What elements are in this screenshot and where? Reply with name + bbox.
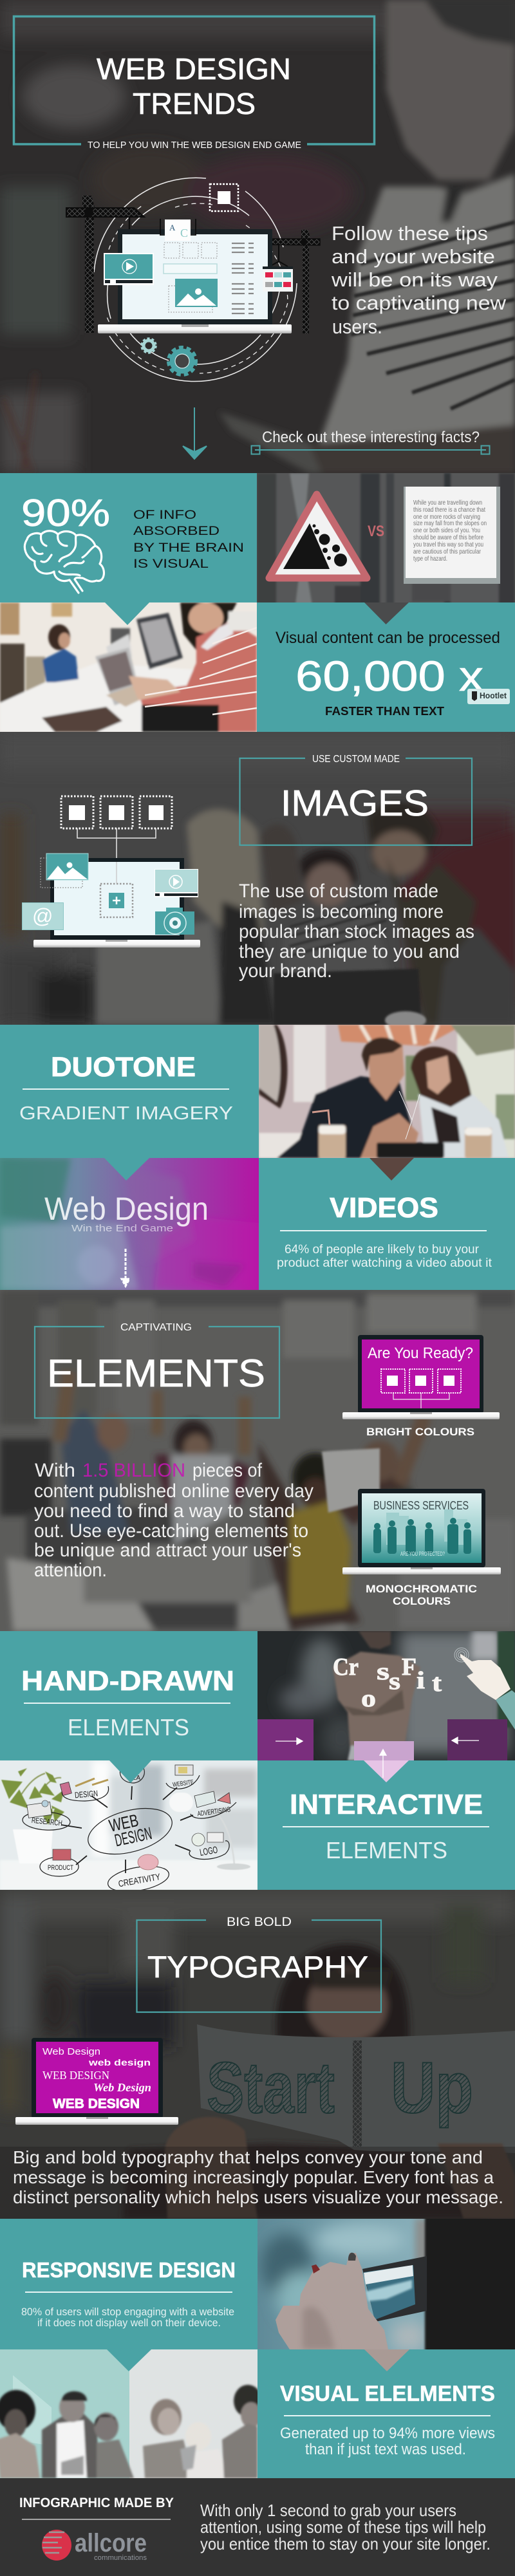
- eyebrow: BIG BOLD: [227, 1916, 292, 1929]
- stat caption: OF INFO: [133, 509, 196, 522]
- text card: are cautious of this particular: [413, 548, 481, 555]
- photo: couple with phone: [259, 1025, 515, 1158]
- duotone title: Win the End Game: [71, 1223, 173, 1234]
- doodle icons: [27, 1765, 230, 1870]
- subheading: ELEMENTS: [68, 1714, 189, 1741]
- photo: women at computers: [0, 602, 257, 732]
- stat: [21, 2306, 234, 2329]
- phone: [362, 2256, 427, 2322]
- subheading: GRADIENT IMAGERY: [19, 1103, 233, 1124]
- icon: rock-fall road sign: [269, 494, 367, 578]
- stat heading: Visual content can be processed: [276, 629, 500, 647]
- paragraph: you need to find a way to stand: [34, 1500, 295, 1522]
- title: WEB DESIGN: [97, 52, 291, 86]
- section: typography: [0, 1890, 515, 2219]
- heading: HAND-DRAWN: [21, 1665, 234, 1697]
- laptop: monochromatic: [342, 1489, 501, 1574]
- hand: [276, 2253, 388, 2349]
- stat: if it does not display well on their device.: [37, 2317, 221, 2329]
- divider: [280, 1230, 487, 1231]
- image tile: [175, 279, 218, 307]
- doodles: [22, 1767, 236, 1896]
- panel: 90% stat: [0, 473, 257, 602]
- paragraph: [239, 881, 474, 982]
- paragraph: attention.: [34, 1560, 107, 1581]
- notch: phone photo: [364, 2349, 409, 2371]
- callout: check out: [251, 429, 489, 454]
- crossfit letters: F: [402, 1654, 417, 1681]
- section: footer: [0, 2478, 515, 2576]
- illustration: custom image laptop: [22, 796, 200, 947]
- icon: pointing hand: [454, 1648, 515, 1730]
- stat: 80% of users will stop engaging with a website: [21, 2306, 234, 2318]
- laptop: type samples: Web Design: [93, 2081, 151, 2094]
- paragraph: Big and bold typography that helps convey your tone and: [13, 2147, 483, 2167]
- crossfit letters: i: [417, 1667, 425, 1694]
- paragraph: The use of custom made: [239, 881, 438, 902]
- stat footnote: FASTER THAN TEXT: [325, 705, 444, 718]
- stat number: 90%: [21, 492, 110, 534]
- stat number: 60,000 x: [295, 652, 483, 700]
- crossfit letters: [333, 1658, 442, 1707]
- section: responsive and visual: [0, 2208, 515, 2478]
- notch: pink with arrow: [364, 1760, 409, 1782]
- paragraph: message is becoming increasingly popular. Every font has a: [13, 2167, 494, 2187]
- heading: VIDEOS: [330, 1192, 438, 1224]
- text card: While you are travelling down: [413, 499, 482, 507]
- section: hero header: [0, 0, 515, 473]
- section: custom images: [0, 732, 515, 1029]
- photo: hand-drawn doodles: PRODUCT: [48, 1864, 73, 1872]
- notch: teal: [107, 2349, 151, 2371]
- panel: videos: [259, 1158, 515, 1290]
- stat caption: BY THE BRAIN: [133, 541, 244, 555]
- dashed arrow: [122, 1249, 129, 1286]
- stat caption: ABSORBED: [133, 525, 220, 538]
- laptop: monochromatic: ARE YOU PROTECTED?: [400, 1551, 445, 1557]
- photo: hand-drawn doodles: ADVERTISING: [197, 1806, 231, 1818]
- intro text: will be on its way: [331, 268, 498, 291]
- notch: photo teal: [105, 602, 149, 625]
- intro text: and your website: [332, 245, 495, 268]
- caption: [366, 1583, 477, 1607]
- photo: hand holding phone: [258, 2219, 515, 2349]
- section: duotone and videos: [0, 1025, 515, 1290]
- type card: C: [180, 227, 188, 239]
- notebook lettering: Start: [207, 2048, 335, 2128]
- heading: IMAGES: [281, 783, 429, 824]
- VS: VS: [368, 523, 384, 540]
- laptop: type samples: WEB DESIGN: [53, 2096, 140, 2111]
- stat: [280, 2425, 495, 2458]
- paragraph: 1.5 BILLION: [82, 1460, 185, 1481]
- notch: teal: [109, 1760, 151, 1783]
- divider: [284, 2415, 491, 2416]
- notch: [104, 1158, 149, 1181]
- section: captivating elements: [0, 1290, 515, 1631]
- left crane: [66, 196, 149, 333]
- divider: [23, 1088, 229, 1090]
- video stat: product after watching a video about it: [277, 1256, 492, 1270]
- intro text: to captivating new: [332, 292, 507, 314]
- video tile: [154, 869, 198, 897]
- video stat: 64% of people are likely to buy your: [285, 1243, 480, 1256]
- paragraph: be unique and attract your user's: [34, 1540, 301, 1561]
- laptop: bright colours: [342, 1335, 500, 1419]
- footer background: [0, 2478, 515, 2576]
- at tile: [22, 902, 63, 929]
- duotone title: Web Design: [44, 1191, 209, 1227]
- stat caption: [133, 509, 244, 571]
- caption: MONOCHROMATIC: [366, 1583, 477, 1595]
- panel: 60,000x stat: [257, 602, 515, 732]
- heading frame: [239, 758, 472, 845]
- photo: hand-drawn doodles: DESIGN: [74, 1788, 98, 1800]
- panel: responsive design: [0, 2219, 258, 2349]
- heading: TYPOGRAPHY: [147, 1950, 368, 1984]
- at tile: @: [32, 904, 53, 928]
- closing text: With only 1 second to grab your users: [200, 2501, 456, 2520]
- badge: Hootlet: [467, 689, 510, 704]
- selection square: [210, 184, 238, 211]
- image tile: [46, 854, 88, 880]
- video tile: [104, 253, 154, 285]
- closing text: [200, 2501, 491, 2553]
- crossfit letters: s: [389, 1668, 400, 1695]
- photo: hand-drawn doodles: CREATIVITY: [117, 1871, 162, 1889]
- notch: photo: [370, 1158, 414, 1181]
- laptop: type samples: WEB DESIGN: [42, 2069, 109, 2082]
- crossfit letters: s: [377, 1658, 389, 1685]
- stat: Generated up to 94% more views: [280, 2425, 495, 2442]
- heading: DUOTONE: [51, 1052, 196, 1083]
- arrows: [276, 1737, 479, 1760]
- text card: one or both sides of you. You: [413, 527, 480, 534]
- panel: interactive: [258, 1760, 515, 1890]
- heading frame: [136, 1920, 381, 2012]
- notch: wood: [364, 602, 409, 624]
- paragraph: popular than stock images as: [239, 921, 474, 942]
- photo: hand-drawn doodles: [0, 1760, 258, 1896]
- gears: [142, 339, 196, 375]
- icon: brain: [24, 531, 104, 593]
- paragraph: they are unique to you and: [239, 941, 460, 962]
- laptop: [98, 229, 292, 333]
- caption: BRIGHT COLOURS: [366, 1426, 474, 1438]
- stat caption: IS VISUAL: [133, 557, 209, 571]
- logo: allcore: communications: [94, 2554, 147, 2562]
- intro text: Follow these tips: [332, 222, 488, 245]
- background photo: man with start up notebook: [0, 1890, 515, 2219]
- video stat: [277, 1243, 492, 1270]
- crossfit letters: t: [432, 1670, 442, 1697]
- paragraph: [13, 2147, 503, 2207]
- type card: [160, 219, 196, 241]
- divider: [25, 2291, 232, 2293]
- heading: INTERACTIVE: [290, 1789, 483, 1820]
- panel: image vs text on wood: [257, 473, 515, 602]
- text card: you travel this way so that you: [413, 541, 483, 548]
- panel: hand-drawn: [0, 1631, 258, 1760]
- paragraph: images is becoming more: [239, 901, 444, 922]
- photo: hand-drawn doodles: LOGO: [199, 1845, 219, 1858]
- text card: size may fall from the slopes on: [413, 519, 487, 527]
- paragraph: [34, 1460, 314, 1581]
- paragraph: out. Use eye-catching elements to: [34, 1520, 308, 1542]
- divider: [22, 2519, 171, 2520]
- divider: [283, 1826, 489, 1827]
- logo: allcore: allcore: [75, 2529, 147, 2557]
- paragraph: your brand.: [239, 960, 332, 982]
- heading: RESPONSIVE DESIGN: [22, 2258, 236, 2282]
- calendar tile: [263, 266, 293, 292]
- panel: visual elements: [258, 2349, 515, 2478]
- paragraph: pieces of: [192, 1460, 263, 1481]
- text card: [404, 487, 500, 584]
- eyebrow: USE CUSTOM MADE: [312, 754, 400, 765]
- right crane: [265, 230, 320, 333]
- laptop: type samples: [15, 2038, 178, 2125]
- arrow down: [183, 407, 207, 459]
- laptop: type samples: web design: [88, 2057, 151, 2067]
- background photo: woman with tablet: [0, 0, 515, 473]
- crossfit letters: o: [361, 1685, 376, 1712]
- divider: [24, 1703, 230, 1704]
- title: TRENDS: [133, 87, 256, 120]
- intro text: users.: [332, 315, 382, 338]
- paragraph: With: [35, 1460, 75, 1481]
- paragraph: content published online every day: [34, 1480, 314, 1502]
- laptop: type samples: Web Design: [42, 2046, 100, 2057]
- text card: this road there is a chance that: [413, 506, 485, 514]
- text card: type of hazard.: [413, 555, 447, 563]
- subheading: ELEMENTS: [326, 1837, 447, 1863]
- photo: hand-drawn doodles: RESEARCH: [31, 1816, 62, 1828]
- heading: VISUAL ELELMENTS: [280, 2382, 495, 2406]
- intro text: [331, 222, 507, 338]
- photo: interactive crossfit page: [258, 1631, 515, 1760]
- photo: hand-drawn doodles: EA: [132, 1775, 140, 1782]
- panel: duotone: [0, 1025, 259, 1158]
- background photo: cheering team: [0, 1290, 515, 1631]
- title frame: [14, 17, 375, 144]
- laptop: monochromatic: BUSINESS SERVICES: [373, 1499, 469, 1512]
- stat: than if just text was used.: [305, 2441, 466, 2458]
- caption: COLOURS: [393, 1595, 451, 1607]
- heading: ELEMENTS: [47, 1352, 265, 1395]
- subtitle: TO HELP YOU WIN THE WEB DESIGN END GAME: [88, 140, 301, 151]
- notebook lettering: [207, 2061, 471, 2128]
- photo: hand-drawn doodles: WEBSITE: [172, 1779, 194, 1789]
- panel: duotone example: [0, 1158, 259, 1290]
- section: visual stats: [0, 473, 515, 732]
- paragraph: distinct personality which helps users visualize your message.: [13, 2187, 503, 2207]
- closing text: attention, using some of these tips will help: [200, 2517, 486, 2537]
- photo: hand-drawn doodles: WEB: [108, 1811, 140, 1836]
- laptop: bright colours: Are You Ready?: [368, 1345, 473, 1362]
- text card: should be aware of this before: [413, 534, 483, 541]
- camera: [155, 908, 194, 935]
- logo: allcore: [42, 2529, 147, 2562]
- photo: group with devices: [0, 2349, 262, 2478]
- heading frame: [35, 1327, 279, 1418]
- crossfit letters: Cr: [333, 1654, 359, 1681]
- text card: one or more rocks of varying: [413, 513, 480, 521]
- callout: check out: Check out these interesting facts?: [262, 429, 480, 446]
- notebook lettering: Up: [391, 2048, 473, 2128]
- illustration: laptop under construction: [66, 178, 320, 382]
- badge: Hootlet: Hootlet: [480, 691, 507, 700]
- type card: A: [169, 223, 176, 232]
- background photo: team at laptop: [0, 732, 515, 1029]
- closing text: you entice them to stay on your site longer.: [200, 2534, 491, 2553]
- photo: hand-drawn doodles: DESIGN: [113, 1824, 153, 1850]
- section: hand-drawn and interactive: [0, 1631, 515, 1896]
- title: [97, 52, 291, 120]
- eyebrow: CAPTIVATING: [120, 1322, 192, 1333]
- credit heading: INFOGRAPHIC MADE BY: [19, 2496, 174, 2510]
